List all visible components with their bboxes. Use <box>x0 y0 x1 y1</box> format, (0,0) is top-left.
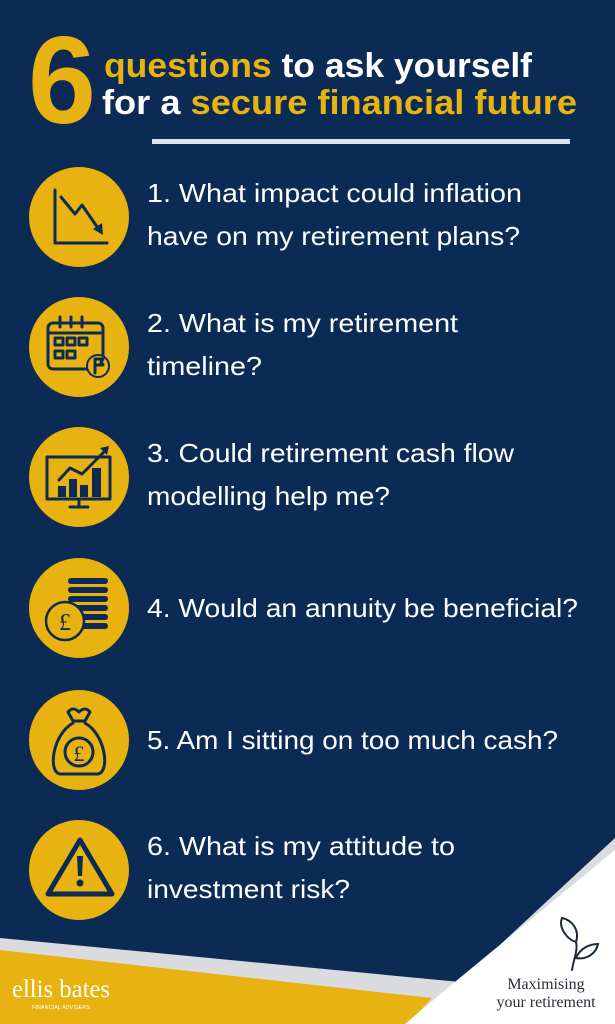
question 4 text: 4. Would an annuity be beneficial? <box>147 593 578 623</box>
logo: ellis bates: FINANCIAL ADVISERS <box>32 1005 91 1011</box>
tagline: your retirement <box>496 994 596 1011</box>
item 3: cash flow modelling <box>29 427 514 527</box>
item 6: risk <box>29 820 455 920</box>
footer bands <box>0 838 615 1024</box>
item 5: cash <box>29 690 558 790</box>
text: have on my retirement plans? <box>147 221 520 251</box>
icon: coin stack with pound <box>29 558 129 658</box>
item 2: timeline <box>29 297 459 397</box>
question 3 text: 3. Could retirement cash flow <box>147 438 514 468</box>
title <box>28 12 577 150</box>
icon: warning triangle <box>29 820 129 920</box>
icon: coin stack with pound: £ <box>59 610 71 636</box>
text: timeline? <box>147 351 262 381</box>
icon: monitor chart <box>29 427 129 527</box>
tagline: Maximising <box>507 976 585 993</box>
question 6 text: 6. What is my attitude to <box>147 831 455 861</box>
icon: money bag <box>29 690 129 790</box>
item 1: inflation <box>29 167 522 267</box>
item 4: annuity <box>29 558 578 658</box>
icon: money bag: £ <box>74 741 84 766</box>
logo: ellis bates: ellis bates <box>12 976 110 1003</box>
text: modelling help me? <box>147 481 390 511</box>
question 1 text: 1. What impact could inflation <box>147 178 522 208</box>
tagline <box>496 976 596 1011</box>
icon: falling chart <box>29 167 129 267</box>
title: questions to ask yourself <box>104 47 533 85</box>
question 5 text: 5. Am I sitting on too much cash? <box>147 725 558 755</box>
icon: plant <box>561 918 598 970</box>
text: investment risk? <box>147 874 350 904</box>
title: for a secure financial future <box>102 84 577 122</box>
title: 6 <box>28 12 96 150</box>
icon: calendar with flag <box>29 297 129 397</box>
question 2 text: 2. What is my retirement <box>147 308 459 338</box>
